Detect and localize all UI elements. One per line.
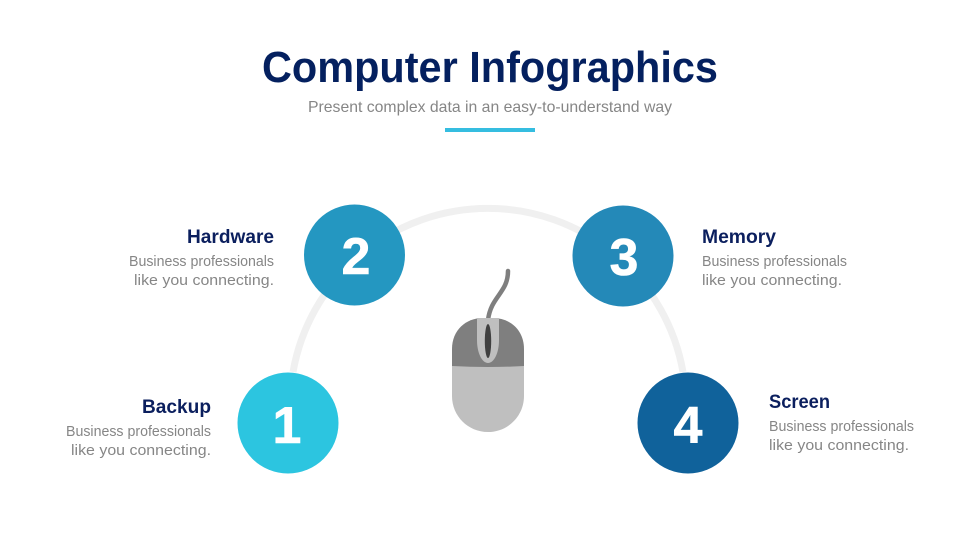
- step 3: Memory: [572, 206, 847, 306]
- step 3: Memory: Business professionals: [702, 253, 847, 270]
- step 3: Memory: Memory: [702, 227, 776, 248]
- step 4: Screen: like you connecting.: [769, 437, 909, 454]
- subtitle: Present complex data in an easy-to-understand way: [308, 99, 672, 116]
- step 2: Hardware: Business professionals: [129, 253, 274, 270]
- step 1: Backup: Business professionals: [66, 423, 211, 440]
- step 3: Memory: 3: [610, 229, 638, 287]
- step 4: Screen: Screen: [769, 392, 830, 413]
- step 2: Hardware: Hardware: [187, 227, 274, 248]
- icon: computer mouse: [452, 271, 524, 432]
- title: Computer Infographics: [262, 43, 718, 92]
- step 2: Hardware: [129, 204, 405, 306]
- step 2: Hardware: 2: [342, 228, 370, 286]
- step 1: Backup: 1: [273, 397, 301, 455]
- step 4: Screen: [638, 372, 914, 474]
- step 1: Backup: like you connecting.: [71, 442, 211, 459]
- step 4: Screen: Business professionals: [769, 418, 914, 435]
- step 3: Memory: like you connecting.: [702, 272, 842, 289]
- title underline: [445, 128, 535, 132]
- step 4: Screen: 4: [674, 397, 703, 455]
- step 2: Hardware: like you connecting.: [134, 272, 274, 289]
- step 1: Backup: Backup: [142, 397, 211, 418]
- connecting arc: [293, 208, 683, 372]
- step 1: Backup: [66, 372, 338, 474]
